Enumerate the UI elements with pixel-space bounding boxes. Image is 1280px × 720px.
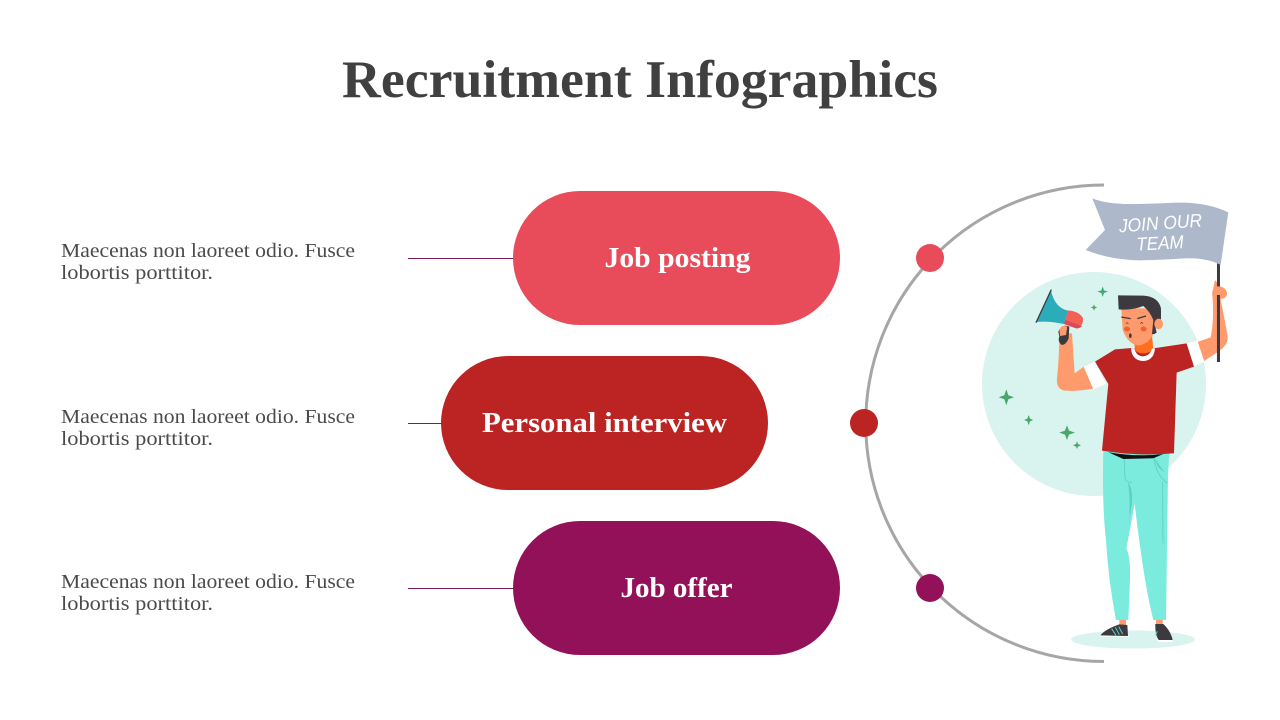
pill: personal interview: Personal interview <box>482 407 727 439</box>
description: step 2: Maecenas non laoreet odio. Fusce <box>61 406 355 428</box>
pill: job posting: Job posting <box>604 242 751 274</box>
pill: personal interview <box>441 356 768 490</box>
flag: TEAM <box>1136 231 1185 255</box>
description: step 3: Maecenas non laoreet odio. Fusce <box>61 571 355 593</box>
flag pole <box>1217 263 1220 362</box>
background circle <box>982 272 1206 496</box>
right sleeve cuff <box>1187 340 1204 366</box>
left sleeve cuff <box>1084 362 1106 389</box>
description: step 1: lobortis porttitor. <box>61 262 213 284</box>
pill: job posting <box>513 191 840 325</box>
pill: job offer <box>513 521 840 655</box>
pill: job offer: Job offer <box>620 572 733 604</box>
legs and shoes <box>1100 450 1173 642</box>
torso, head and arms <box>999 198 1228 459</box>
description: step 2: lobortis porttitor. <box>61 428 213 450</box>
description: step 1: Maecenas non laoreet odio. Fusce <box>61 240 355 262</box>
collar <box>1131 348 1155 361</box>
hair <box>1118 295 1161 334</box>
left arm <box>1057 333 1095 391</box>
semicircle arc with markers <box>850 185 1104 662</box>
right arm <box>1193 280 1228 362</box>
marker 2 <box>850 409 878 437</box>
flag: JOIN OUR <box>1117 210 1203 236</box>
megaphone <box>1036 290 1083 345</box>
illustration: recruiter with megaphone and flag <box>982 198 1228 649</box>
step 3: job offer <box>61 521 840 655</box>
description: step 3: lobortis porttitor. <box>61 593 213 615</box>
hand on pole <box>1212 286 1227 299</box>
marker 1 <box>916 244 944 272</box>
marker 3 <box>916 574 944 602</box>
title: Recruitment Infographics <box>342 51 938 109</box>
ground shadow <box>1071 630 1195 648</box>
sparkles <box>999 286 1108 449</box>
shirt <box>1095 343 1194 454</box>
step 1: job posting <box>61 191 840 325</box>
head <box>1121 308 1154 346</box>
face details <box>1121 316 1147 338</box>
step 2: personal interview <box>61 356 768 490</box>
ear <box>1154 319 1163 329</box>
flag <box>1086 198 1228 265</box>
neck <box>1134 335 1153 353</box>
belt <box>1108 452 1163 459</box>
